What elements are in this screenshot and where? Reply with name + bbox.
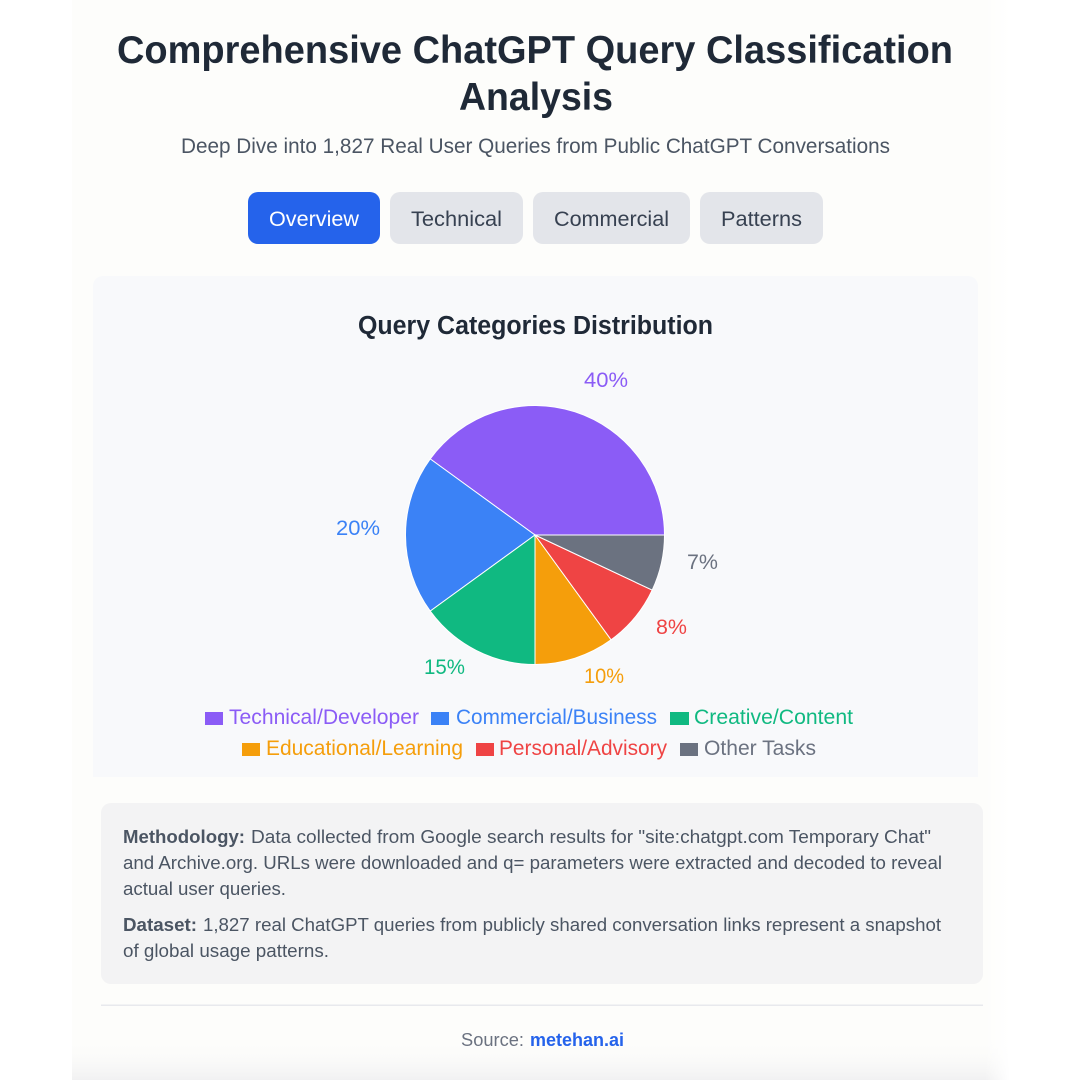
subtitle: Deep Dive into 1,827 Real User Queries from Public ChatGPT Conversations — [181, 135, 890, 158]
panel: query categories distribution — [93, 276, 978, 777]
source footer: metehan.ai — [530, 1029, 624, 1050]
title — [117, 29, 953, 119]
tab: technical — [390, 192, 523, 244]
tab: overview (active) — [248, 192, 380, 244]
legend: educational/learning: Educational/Learning — [266, 737, 463, 760]
tab: commercial: Commercial — [554, 208, 669, 231]
legend: personal/advisory: Personal/Advisory — [499, 737, 667, 760]
pie percentage labels: 40% — [584, 369, 628, 392]
methodology text: and Archive.org. URLs were downloaded and q= parameters were extracted and decoded to reveal — [123, 853, 942, 873]
source footer — [461, 1029, 624, 1050]
pie percentage labels: 7% — [687, 551, 718, 574]
tab: technical: Technical — [411, 208, 502, 231]
tab: overview (active): Overview — [269, 208, 360, 231]
legend: other tasks: Other Tasks — [704, 737, 816, 760]
pie percentage labels — [336, 369, 718, 688]
legend: technical/developer: Technical/Developer — [229, 706, 419, 729]
source footer: Source: — [461, 1029, 524, 1050]
dataset text: Dataset: — [123, 915, 197, 935]
methodology text: Data collected from Google search results for "site:chatgpt.com Temporary Chat" — [251, 827, 931, 847]
methodology text — [123, 827, 942, 899]
panel: methodology note — [101, 803, 983, 984]
methodology text: Methodology: — [123, 827, 245, 847]
chart heading: Query Categories Distribution — [358, 312, 713, 340]
pie percentage labels: 8% — [656, 616, 687, 639]
legend: creative/content: Creative/Content — [694, 706, 853, 729]
dataset text: of global usage patterns. — [123, 941, 329, 961]
legend: commercial/business: Commercial/Business — [456, 706, 657, 729]
tab navigation — [248, 192, 823, 244]
dataset text — [123, 915, 941, 961]
dataset text: 1,827 real ChatGPT queries from publicly shared conversation links represent a snapshot — [203, 915, 941, 935]
pie chart — [405, 405, 664, 664]
tab: patterns: Patterns — [721, 208, 802, 231]
pie percentage labels: 20% — [336, 517, 380, 540]
pie percentage labels: 10% — [584, 665, 624, 688]
methodology text: actual user queries. — [123, 879, 286, 899]
chart legend — [205, 706, 853, 760]
tab: commercial — [533, 192, 690, 244]
title: Comprehensive ChatGPT Query Classification — [117, 29, 953, 72]
title: Analysis — [459, 76, 613, 119]
pie percentage labels: 15% — [424, 656, 465, 679]
tab: patterns — [700, 192, 823, 244]
